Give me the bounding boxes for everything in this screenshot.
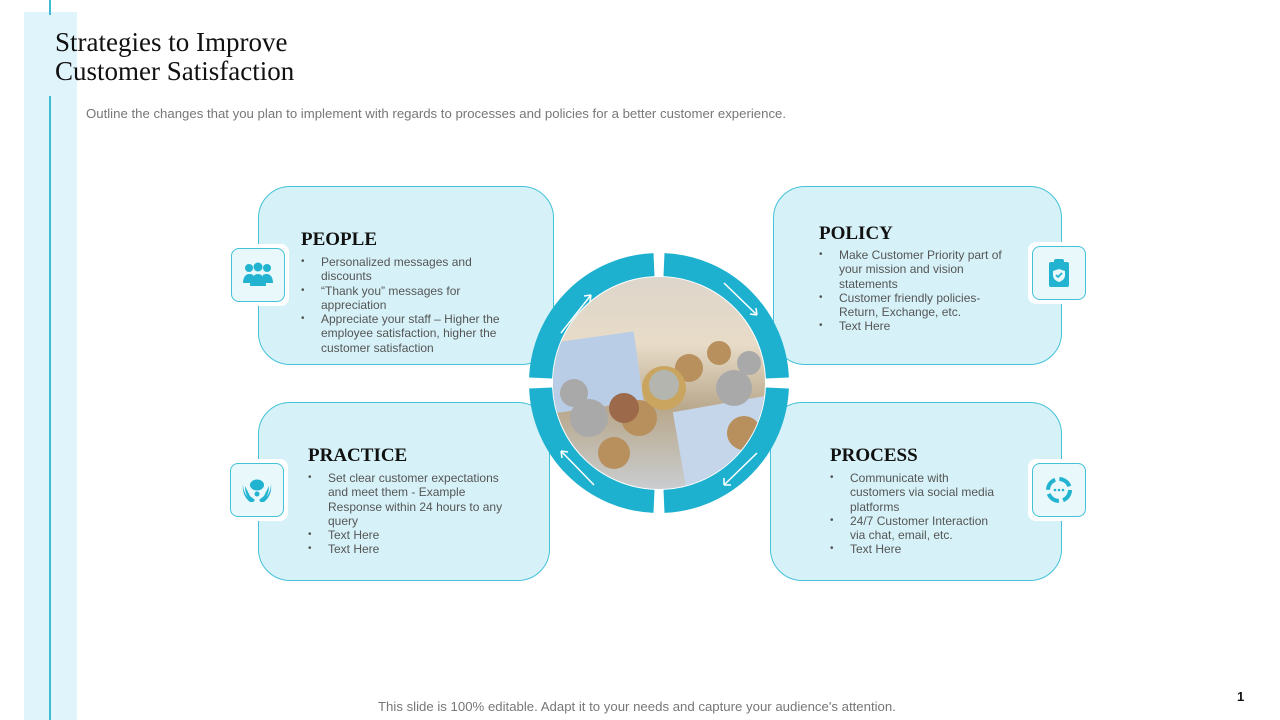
heading: process: PROCESS — [830, 445, 918, 466]
subtitle: Outline the changes that you plan to implement with regards to processes and policies for a better customer experience. — [86, 106, 786, 121]
list: practice: Set clear customer expectations and meet them - Example Response within 24 hours to any query — [328, 471, 502, 528]
heading: people: PEOPLE — [301, 229, 377, 250]
center ring with photo — [529, 253, 789, 513]
heading: policy: POLICY — [819, 223, 893, 244]
arrows — [561, 283, 757, 485]
list: people: Appreciate your staff – Higher the employee satisfaction, higher the customer satisfaction — [321, 312, 500, 355]
list: process — [830, 471, 994, 556]
list: policy: Text Here — [839, 319, 890, 333]
list: process: 24/7 Customer Interaction via chat, email, etc. — [850, 514, 988, 542]
panel: process — [770, 402, 1062, 581]
panel: policy — [773, 186, 1062, 365]
list: process: Text Here — [850, 542, 901, 556]
icon: process — [1028, 459, 1090, 521]
page number: 1 — [1237, 689, 1244, 704]
list: practice — [308, 471, 502, 556]
list: policy — [819, 248, 1002, 333]
icon: policy — [1028, 242, 1090, 304]
title: Strategies to Improve — [55, 27, 287, 57]
title: Customer Satisfaction — [55, 56, 294, 86]
list: practice: Text Here — [328, 542, 379, 556]
list: policy: Make Customer Priority part of your mission and vision statements — [839, 248, 1002, 291]
accent line top — [49, 0, 51, 15]
list: people — [301, 255, 500, 355]
icon: practice — [226, 459, 288, 521]
list: people: Personalized messages and discounts — [321, 255, 472, 283]
list: practice: Text Here — [328, 528, 379, 542]
icon: people — [227, 244, 289, 306]
accent line — [49, 96, 51, 720]
panel: practice — [258, 402, 550, 581]
list: policy: Customer friendly policies- Return, Exchange, etc. — [839, 291, 980, 319]
ring segments — [541, 265, 777, 501]
heading: practice: PRACTICE — [308, 445, 407, 466]
title — [55, 27, 294, 86]
list: process: Communicate with customers via social media platforms — [850, 471, 994, 514]
list: people: “Thank you” messages for appreciation — [321, 284, 460, 312]
photo — [553, 277, 765, 489]
left accent strip — [24, 12, 77, 720]
footer: This slide is 100% editable. Adapt it to your needs and capture your audience's attention. — [378, 699, 896, 714]
panel: people — [258, 186, 554, 365]
